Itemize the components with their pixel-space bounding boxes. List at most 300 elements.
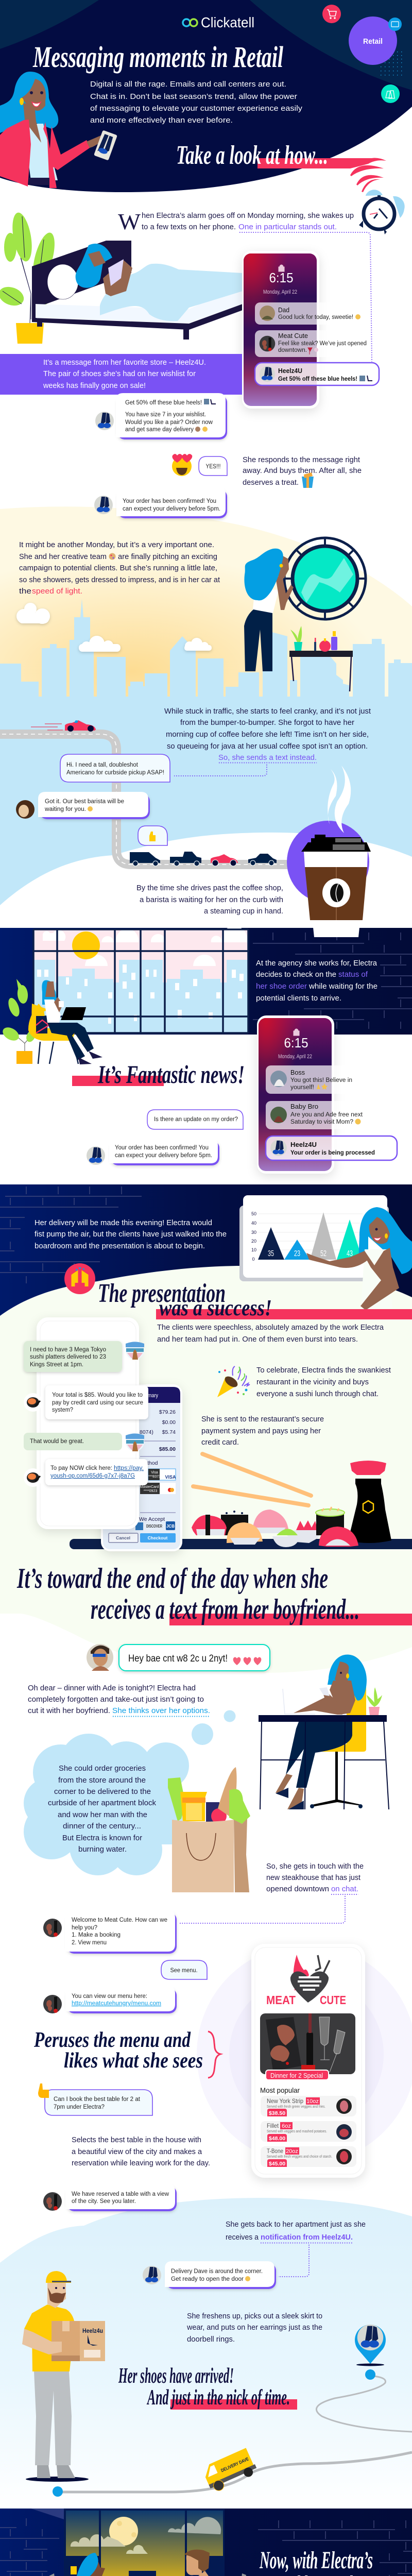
phone: menu xyxy=(251,1944,365,2178)
chart panel: triangle chart: 23 xyxy=(294,1249,300,1258)
menu item: New York Strip: Served with fresh green veggies and fries. xyxy=(267,2105,325,2109)
illustration: Electra on chair with laptop xyxy=(28,980,102,1064)
heading: toward the end of the day xyxy=(16,1563,412,1625)
illustration: city skyline xyxy=(0,599,412,928)
tag: Dinner for 2 Special: Dinner for 2 Special xyxy=(270,2072,323,2079)
badge: Retail circle xyxy=(349,16,397,65)
story text: oh dear: cut it with her boyfriend. xyxy=(28,1706,110,1715)
panel: hero background xyxy=(0,0,412,192)
story text: delivery tonight xyxy=(35,1218,227,1250)
chat bubble: update question: Is there an update on my order? xyxy=(154,1116,238,1123)
illustration: Electra at mirror xyxy=(244,549,294,671)
menu item: Fillet: Served with veggies and mashed potatoes. xyxy=(267,2130,327,2133)
thought cloud text: corner to be delivered to the xyxy=(54,1787,151,1796)
menu item: New York Strip: 10oz xyxy=(306,2098,319,2105)
chat bubble: update question xyxy=(147,1110,243,1129)
phone: lock screen Monday: Monday, April 22 xyxy=(263,289,297,295)
logo: Meat Cute: MEAT xyxy=(266,1993,296,2007)
menu item: T-Bone: 20oz xyxy=(286,2148,298,2155)
story text: traffic: While stuck in traffic, she starts to feel cranky, and it’s not just xyxy=(164,707,371,716)
story text: barista waiting: a barista is waiting for her on the curb with xyxy=(140,895,283,904)
chat bubble: delivery confirmation xyxy=(109,1138,219,1165)
traffic cars xyxy=(130,852,277,866)
story text: important Monday: are finally pitching an exciting xyxy=(118,552,217,561)
illustration: delivery van: DELIVERY DAVE xyxy=(220,2456,249,2473)
phone: payment summary: MasterCard xyxy=(140,1485,159,1489)
avatar: Meat Cute xyxy=(43,2192,62,2211)
illustration: sushi counter xyxy=(70,1454,412,1549)
heading: Peruses the menu: Peruses the menu and xyxy=(33,2028,191,2052)
phone: payment summary: thod xyxy=(147,1460,158,1466)
chat bubble: reservation: We have reserved a table with a view xyxy=(72,2191,169,2197)
chat bubble: See menu: See menu. xyxy=(170,1968,198,1974)
avatar: Meat Cute xyxy=(43,1995,62,2013)
menu item: New York Strip xyxy=(261,2096,356,2116)
story text: celebrate: To celebrate, Electra finds the swankiest xyxy=(256,1366,391,1375)
phone: payment summary: $79.26 xyxy=(159,1409,176,1415)
chat bubble: boyfriend text xyxy=(119,1645,270,1671)
story text: alarm xyxy=(118,209,354,234)
thought cloud text: dinner of the century... xyxy=(63,1822,141,1831)
notification: Heelz4U highlighted xyxy=(255,363,379,385)
chat bubble: menu link: You can view our menu here: xyxy=(72,1993,147,1999)
chat bubble: menu link xyxy=(65,1986,177,2013)
story text: clients speechless xyxy=(157,1323,384,1344)
chat bubble: YES xyxy=(199,456,227,476)
illustration: delivery man with box: Heelz4u xyxy=(82,2327,103,2334)
story text: payment: She is sent to the restaurant’s secure xyxy=(201,1415,324,1423)
phone: lock screen order status xyxy=(257,1015,334,1174)
panel: purple message band: The pair of shoes she’s had on her wishlist for xyxy=(43,369,196,378)
chat bubble: See menu xyxy=(161,1960,207,1979)
story text: back at apartment: She gets back to her apartment just as she xyxy=(226,2220,366,2229)
icon: alarm clock xyxy=(359,190,405,234)
cloud 1 xyxy=(16,603,50,624)
chart panel: triangle chart: 50 xyxy=(251,1211,256,1216)
panel: office band xyxy=(0,928,412,1035)
phone: payment summary: mary xyxy=(148,1393,158,1399)
menu item: Fillet xyxy=(261,2121,356,2142)
story text: freshens xyxy=(186,2312,322,2344)
chat bubble: welcome xyxy=(65,1910,177,1954)
chat bubble: book table: 7pm under Electra? xyxy=(54,2104,105,2110)
story text: delivery tonight: boardroom and the presentation is about to begin. xyxy=(35,1242,205,1250)
dotted connector to Meat Cute chat xyxy=(180,1894,358,1923)
chat: payment link xyxy=(24,1459,148,1487)
illustration: Electra at table with phone xyxy=(259,1655,389,1809)
chat bubble: welcome: 1. Make a booking xyxy=(72,1932,121,1938)
story text: responds: deserves a treat. xyxy=(243,478,299,487)
story text: steakhouse: opened downtown xyxy=(266,1885,329,1893)
story text: selects: Selects the best table in the house with xyxy=(72,2136,201,2144)
intro text: Digital is all the rage. Emails and call centers are out. xyxy=(90,80,286,89)
bricks xyxy=(253,933,412,1029)
chat bubble: delivery confirmation: can expect your delivery before 5pm. xyxy=(115,1153,212,1159)
panel: purple message band xyxy=(0,354,242,395)
icon: credit card circle xyxy=(388,18,402,31)
story text: clients speechless: and her team had put in. One of them even burst into tears. xyxy=(157,1335,358,1344)
story text: agency: while waiting for the xyxy=(308,982,377,991)
chat bubble: coffee order: Hi. I need a tall, doubleshot xyxy=(66,762,139,768)
heading: Peruses the menu: likes what she sees xyxy=(64,2049,203,2073)
steam xyxy=(328,766,351,833)
chat: sushi order xyxy=(24,1341,144,1372)
chat bubble: offer: Get 50% off these blue heels! xyxy=(125,400,202,406)
menu item: Fillet: $48.00 xyxy=(269,2136,285,2142)
phone: payment summary xyxy=(101,1384,182,1551)
phone: payment summary: ****0923 xyxy=(144,1489,157,1493)
chat bubble: thumbs up xyxy=(138,826,167,845)
phone: lock screen Monday: 6:15 xyxy=(269,270,294,285)
story text: responds xyxy=(243,455,362,487)
story text: agency: decides to check on the xyxy=(256,970,336,979)
heading: Take a look at how: Take a look at how... xyxy=(176,141,328,170)
story text: traffic: so queueing for java at her usual coffee spot isn’t an option. xyxy=(167,742,368,751)
story text: delivery tonight: fist pump the air, but the clients have just walked into the xyxy=(35,1230,227,1239)
story text: clients speechless: The clients were speechless, absolutely amazed by the work Electra xyxy=(157,1323,384,1332)
menu item: Fillet: Fillet xyxy=(267,2122,279,2129)
icon: gift xyxy=(302,472,314,488)
chart panel: triangle chart: 43 xyxy=(347,1249,353,1258)
chat bubble: offer: You have size 7 in your wishlist. xyxy=(125,412,206,418)
heading: The presentation was a success xyxy=(98,1279,412,1320)
phone: payment summary: Visa xyxy=(151,1471,158,1475)
chat: sushi order: I need to have 3 Mega Tokyo xyxy=(30,1347,106,1353)
illustration: delivery man with box xyxy=(22,2271,105,2482)
notification: Heelz4U processing xyxy=(266,1136,397,1160)
story text: barista waiting xyxy=(136,884,283,916)
chat bubble: barista reply: Got it. Our best barista will be xyxy=(45,799,124,805)
story text: freshens: She freshens up, picks out a sleek skirt to xyxy=(187,2312,322,2320)
chat: payment link: https://pay. xyxy=(114,1465,144,1471)
heading: shoes arrived: And just in the nick of time. xyxy=(146,2386,290,2410)
bricks xyxy=(0,1187,142,1283)
chat bubble: welcome: Welcome to Meat Cute. How can we xyxy=(72,1917,167,1923)
thought cloud xyxy=(24,1734,189,1875)
phone: lock screen order status: Monday, April 22 xyxy=(278,1054,312,1060)
cloud 3 xyxy=(184,638,212,651)
heading: The presentation was a success: The presentation xyxy=(98,1279,226,1308)
panel: sunrise hill background xyxy=(0,506,412,701)
menu item: Fillet: 6oz xyxy=(282,2123,291,2129)
title: Messaging moments in Retail xyxy=(32,40,284,74)
thought cloud text: But Electra is known for xyxy=(62,1834,142,1842)
dot grid decoration xyxy=(381,52,402,75)
heading: Its Fantastic news: It’s Fantastic news! xyxy=(97,1060,245,1089)
illustration: plant in office xyxy=(1,979,37,1064)
avatar: shoes xyxy=(87,1146,105,1165)
avatar: shoes xyxy=(143,2266,161,2284)
story text: steakhouse: new steakhouse that has just xyxy=(266,1873,361,1882)
story text: payment: payment system and pays using her xyxy=(201,1427,321,1435)
notification: Dad xyxy=(255,302,371,325)
illustration: mirror xyxy=(284,538,366,619)
notification: Heelz4U highlighted: Get 50% off these blue heels! xyxy=(278,376,357,382)
illustration: plant xyxy=(0,211,62,344)
intro text xyxy=(90,80,303,125)
phone: payment summary: Checkout xyxy=(148,1535,168,1540)
red highlight bar and alarm sound waves xyxy=(258,158,386,192)
icon: party popper xyxy=(217,1366,250,1397)
notification: Baby Bro: Saturday to visit Mom? xyxy=(290,1119,353,1125)
thought cloud text: curbside of her apartment block xyxy=(48,1799,156,1807)
story text: oh dear: Oh dear – dinner with Ade is tonight?! Electra had xyxy=(28,1684,196,1692)
story text: traffic: morning cup of coffee before she left! Time isn’t on her side, xyxy=(166,730,369,739)
phone: lock screen Monday xyxy=(242,251,319,409)
panel: boardroom dark section xyxy=(0,1184,412,1318)
thought bubble dots xyxy=(192,1710,236,1745)
story text: alarm: W xyxy=(118,209,141,234)
chat: payment link: yoush-op.com/65d6-g7x7-j8a7G xyxy=(50,1473,135,1479)
avatar: coffee xyxy=(16,800,35,819)
chart panel: triangle chart: 40 xyxy=(251,1221,256,1226)
dotted connector to phone xyxy=(239,232,372,362)
chat bubble: offer: Would you like a pair? Order now xyxy=(125,419,213,426)
chat: total: pay by credit card using our secure xyxy=(52,1400,143,1406)
intro text: Chat is in. Don’t be last season’s trend, allow the power xyxy=(90,92,297,101)
notification: Meat Cute xyxy=(255,330,371,357)
story text: important Monday xyxy=(19,540,220,596)
chat bubble: welcome: 2. View menu xyxy=(72,1940,107,1946)
avatar: boyfriend xyxy=(87,1644,113,1671)
illustration: dressing table xyxy=(289,626,353,691)
story text: steakhouse xyxy=(266,1862,364,1893)
panel: purple message band: weeks has finally gone on sale! xyxy=(43,381,146,390)
chat: great: That would be great. xyxy=(30,1438,84,1445)
story text: important Monday: so she showers, gets dressed to impress, and is in her car at xyxy=(19,575,220,584)
story text: agency xyxy=(256,959,377,1003)
chat: sushi order: Kings Street at 1pm. xyxy=(30,1362,83,1368)
story text: barista waiting: By the time she drives past the coffee shop, xyxy=(136,884,283,892)
phone: payment summary: ***8373 xyxy=(148,1475,161,1479)
menu item: T-Bone: T-Bone xyxy=(267,2147,283,2155)
story text: steakhouse: So, she gets in touch with the xyxy=(266,1862,364,1871)
panel: white hill xyxy=(0,833,412,928)
chat: total xyxy=(24,1385,148,1419)
notification: Heelz4U processing: Heelz4U xyxy=(290,1141,317,1148)
menu item: New York Strip: $38.50 xyxy=(269,2110,285,2116)
panel: light blue evening section xyxy=(0,2198,412,2508)
notification: Baby Bro: Baby Bro xyxy=(290,1103,318,1110)
story text: oh dear: She thinks over her options. xyxy=(112,1706,210,1715)
chat bubble: barista reply: waiting for you. xyxy=(44,806,86,812)
coffee cup illustration xyxy=(287,821,371,937)
heading: Peruses the menu xyxy=(33,2028,203,2073)
chat bubble: barista reply xyxy=(38,792,150,819)
notification: Baby Bro: Are you and Ade free next xyxy=(290,1112,363,1118)
dotted connector to delivery chat xyxy=(261,2243,353,2277)
chat bubble: offer: and get same day delivery xyxy=(125,427,194,433)
story text: celebrate: restaurant in the vicinity and buys xyxy=(256,1378,369,1386)
chat bubble: delivery dave xyxy=(165,2261,276,2289)
notification: Dad: Good luck for today, sweetie! xyxy=(278,314,353,320)
chart panel: triangle chart: 30 xyxy=(251,1230,256,1235)
notification: Meat Cute: Feel like steak? We’ve just opened xyxy=(278,341,367,347)
thought cloud text: She could order groceries xyxy=(59,1764,146,1773)
story text: agency: potential clients to arrive. xyxy=(256,994,341,1003)
chat: total: system? xyxy=(52,1407,73,1413)
road xyxy=(0,734,296,865)
background circles behind menu phone xyxy=(197,1944,412,2164)
logo: Clickatell: Clickatell xyxy=(201,14,254,30)
chat bubble: order confirmed xyxy=(116,487,227,518)
menu item: T-Bone: Served with fresh veggies and choice of starch. xyxy=(267,2155,332,2159)
chat: great xyxy=(24,1433,144,1451)
illustration: grocery bag xyxy=(168,1767,250,1892)
chat bubble: reservation xyxy=(65,2184,177,2211)
chat bubble: book table xyxy=(45,2090,152,2115)
story text: delivery tonight: Her delivery will be made this evening! Electra would xyxy=(35,1218,212,1227)
chat bubble: menu link: http://meatcutehungry/menu.com xyxy=(72,2001,161,2007)
heading: shoes arrived xyxy=(118,2364,297,2410)
story text: traffic: from the bumper-to-bumper. She forgot to have her xyxy=(180,718,354,727)
illustration: delivery van xyxy=(201,2447,259,2494)
chart panel: triangle chart: 10 xyxy=(251,1247,256,1252)
story text: traffic xyxy=(164,707,371,762)
heading: shoes arrived: Her shoes have arrived! xyxy=(118,2364,234,2388)
icon: thumbs up xyxy=(38,2083,49,2098)
icon: shopping cart circle xyxy=(322,5,341,23)
chat bubble: YES: YES!!! xyxy=(206,464,220,470)
photo: steak dinner xyxy=(260,2013,355,2074)
phone: payment summary: 8074) xyxy=(140,1429,153,1435)
avatar: shoes xyxy=(95,412,114,430)
icon: raised hands circle xyxy=(64,1263,95,1294)
notification: Heelz4U processing: Your order is being processed xyxy=(290,1150,375,1156)
story text: agency: status of xyxy=(338,970,368,979)
story text: freshens: doorbell rings. xyxy=(187,2335,235,2344)
icon: curly brace xyxy=(208,2031,220,2078)
chat bubble: book table: Can I book the best table for 2 at xyxy=(54,2096,141,2103)
chat bubble: delivery dave: Delivery Dave is around the corner. xyxy=(171,2268,263,2275)
notification: Boss: yourself! xyxy=(290,1084,314,1091)
story text: responds: She responds to the message right xyxy=(243,455,360,464)
story text: oh dear xyxy=(28,1684,210,1717)
phone: payment summary: Cancel xyxy=(116,1535,130,1540)
illustration: man at dinner xyxy=(157,2550,228,2576)
story text: back at apartment xyxy=(226,2220,366,2242)
avatar: Meat Cute xyxy=(43,1919,62,1937)
story text: traffic: So, she sends a text instead. xyxy=(218,753,317,762)
dotted connector to coffee order xyxy=(174,762,317,776)
notification: Baby Bro xyxy=(266,1101,364,1129)
story text: freshens: wear, and puts on her earrings just as the xyxy=(186,2323,322,2332)
chat bubble: coffee order: Americano for curbside pickup ASAP! xyxy=(66,770,164,776)
phone: payment summary: JCB xyxy=(166,1524,175,1529)
phone: payment summary: $5.74 xyxy=(162,1429,176,1435)
notification: Dad: Dad xyxy=(278,306,289,314)
dot: route start xyxy=(53,2486,63,2497)
menu item: T-Bone xyxy=(261,2146,356,2167)
panel: purple message band: It’s a message from her favorite store – Heelz4U. xyxy=(43,358,206,367)
menu item: New York Strip: New York Strip xyxy=(267,2097,303,2105)
bricks xyxy=(0,2518,412,2576)
phone: lock screen order status: 6:15 xyxy=(284,1035,308,1050)
chart panel: triangle chart xyxy=(239,1195,389,1281)
chat bubble: order confirmed: can expect your delivery before 5pm. xyxy=(123,506,220,512)
notification: Boss xyxy=(266,1065,364,1094)
story text: agency: At the agency she works for, Electra xyxy=(256,959,377,968)
heading: The presentation was a success: was a success! xyxy=(159,1295,272,1320)
story text: important Monday: It might be another Monday, but it’s a very important one. xyxy=(19,540,214,549)
intro text: and more effectively than ever before. xyxy=(90,116,233,125)
chat bubble: delivery confirmation: Your order has been confirmed! You xyxy=(115,1145,209,1151)
chat bubble: reservation: of the city. See you later. xyxy=(72,2198,136,2205)
story text: important Monday: She and her creative team xyxy=(19,552,107,561)
phone: payment summary: $0.00 xyxy=(162,1419,176,1426)
story text: selects: a beautiful view of the city and makes a xyxy=(72,2147,202,2156)
story text: agency: her shoe order xyxy=(256,982,307,991)
phone: payment summary: $85.00 xyxy=(159,1446,176,1452)
story text: barista waiting: a steaming cup in hand. xyxy=(204,907,283,916)
badge: Retail circle: Retail xyxy=(363,37,383,46)
chart panel: triangle chart: 52 xyxy=(320,1249,327,1258)
icon: location pin xyxy=(355,2325,386,2380)
phone: payment summary: We Accept xyxy=(139,1516,165,1522)
avatar: shoes xyxy=(94,496,113,514)
illustration: bed with sleeping Electra xyxy=(32,241,243,340)
chat: payment link: To pay NOW click here: xyxy=(50,1465,112,1471)
logo: Meat Cute: CUTE xyxy=(320,1993,346,2007)
heading: Its Fantastic news xyxy=(72,1060,245,1089)
phone: payment summary: DISCOVER xyxy=(146,1524,162,1529)
window with city view xyxy=(33,926,248,1033)
story text: selects: reservation while leaving work for the day. xyxy=(72,2159,210,2167)
story text: selects xyxy=(72,2136,210,2167)
story text: important Monday: the xyxy=(19,587,31,596)
story text: payment: credit card. xyxy=(201,1438,239,1447)
story text: alarm: to a few texts on her phone. xyxy=(142,223,236,231)
story text: alarm: One in particular stands out. xyxy=(238,223,337,231)
cloud 2 xyxy=(79,636,121,652)
chat bubble: coffee order xyxy=(60,754,170,782)
chat bubble: order confirmed: Your order has been confirmed! You xyxy=(123,498,216,504)
notification: Meat Cute: downtown. xyxy=(278,347,307,353)
notification: Heelz4U highlighted: Heelz4U xyxy=(278,367,302,375)
chat bubble: boyfriend text: Hey bae cnt w8 2c u 2nyt! xyxy=(128,1653,228,1664)
illustration: woman holding phone xyxy=(0,72,117,188)
notification: Boss: Boss xyxy=(290,1069,305,1076)
notification: Boss: You got this! Believe in xyxy=(290,1077,352,1083)
window: night city xyxy=(64,2509,225,2576)
chart panel: triangle chart: 0 xyxy=(252,1257,255,1262)
story text: important Monday: campaign to potential clients. But she’s running a little late, xyxy=(19,564,217,572)
story text: celebrate xyxy=(256,1366,391,1398)
panel: evening band xyxy=(0,2509,412,2576)
story text: responds: away. And buys them. After all, she xyxy=(243,466,362,475)
story text: oh dear: completely forgotten and take-out just isn’t going to xyxy=(28,1695,204,1704)
chart panel: triangle chart: 20 xyxy=(251,1239,256,1244)
chat bubble: delivery dave: Get ready to open the door xyxy=(171,2276,244,2282)
phone: chat xyxy=(37,1317,139,1529)
icon: heart eyes emoji xyxy=(172,454,192,476)
heading: Most popular: Most popular xyxy=(260,2086,300,2094)
chart panel: triangle chart: 35 xyxy=(268,1249,274,1258)
thought cloud text: from the store around the xyxy=(58,1776,146,1785)
illustration: Electra presenting xyxy=(306,1207,412,1310)
story text: payment xyxy=(201,1415,324,1447)
illustration: Electra at dinner xyxy=(62,2553,142,2576)
menu item: T-Bone: $45.00 xyxy=(269,2161,285,2167)
thought cloud text: and wow her man with the xyxy=(58,1810,147,1819)
panel: cream hill xyxy=(0,1266,412,1673)
icon: shopping bags circle xyxy=(381,84,400,103)
illustration: chairs and table xyxy=(49,2573,246,2576)
chat bubble: welcome: help you? xyxy=(72,1925,97,1931)
thought cloud text: burning water. xyxy=(78,1845,127,1854)
story text: back at apartment: receives a xyxy=(226,2233,259,2242)
route path xyxy=(61,2376,412,2492)
